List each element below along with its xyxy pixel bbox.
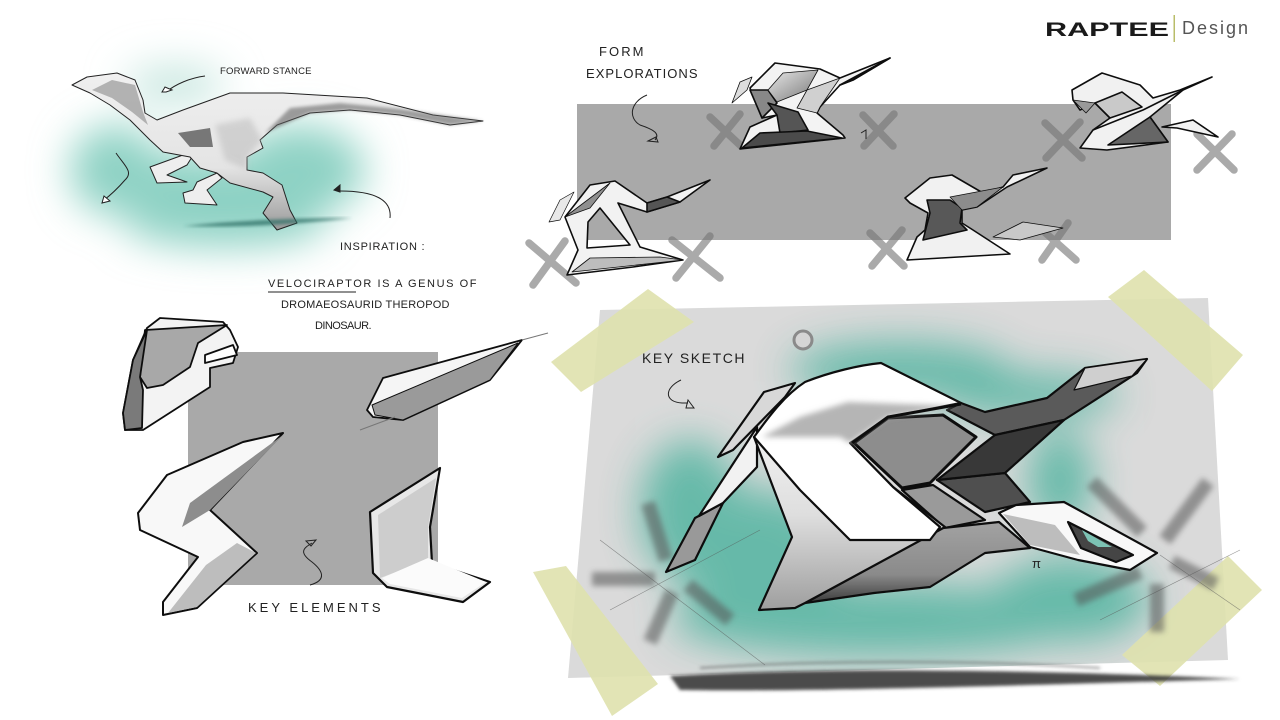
tail shading <box>265 103 483 133</box>
upper fork <box>699 427 757 516</box>
logo: Raptee Design: Design <box>1182 18 1248 38</box>
element sketch: bracket <box>370 468 490 602</box>
watercolor wash behind raptor <box>70 65 365 247</box>
motorcycle sketch <box>666 359 1157 610</box>
rejection crosses <box>529 114 1234 285</box>
watercolor wash <box>640 342 1150 656</box>
note: velociraptor description: VELOCIRAPTOR IS A GENUS OF <box>268 278 478 290</box>
heading: key sketch: KEY SKETCH <box>642 350 746 366</box>
gray panel <box>854 415 976 488</box>
pi mark: π <box>1032 556 1041 571</box>
arrow <box>304 540 322 585</box>
tank shading <box>762 402 958 443</box>
arrow <box>632 95 658 142</box>
arrows <box>102 76 390 218</box>
panel: form explorations <box>529 44 1234 285</box>
element sketch: blade <box>360 333 548 430</box>
headlight <box>718 383 795 457</box>
lower dark panel <box>937 473 1030 512</box>
form sketch 1 <box>732 58 890 149</box>
middle panel <box>902 485 985 528</box>
element sketch: visor <box>123 318 238 430</box>
panel: velociraptor inspiration <box>70 65 483 332</box>
form sketch 3 <box>549 180 710 275</box>
form sketch 2 <box>1072 73 1218 150</box>
element sketch: zigzag <box>138 433 283 615</box>
head shading <box>92 80 148 125</box>
heading: form explorations <box>586 44 699 81</box>
note: inspiration: INSPIRATION : <box>340 241 426 253</box>
arrow <box>668 380 694 408</box>
heading: form explorations: EXPLORATIONS <box>586 66 699 81</box>
logo: Raptee Design: RAPTEE <box>1045 20 1169 41</box>
note: velociraptor description: DINOSAUR. <box>315 320 373 332</box>
panel edge <box>852 404 961 443</box>
upper dark panel <box>937 420 1064 480</box>
white top shell <box>754 363 961 540</box>
pinned paper <box>568 298 1228 678</box>
gray backdrop <box>188 352 438 585</box>
small mark <box>861 130 866 139</box>
side shell <box>754 420 945 610</box>
belly shadow <box>178 128 213 147</box>
rear fender <box>999 502 1157 570</box>
thigh shading <box>215 118 262 170</box>
logo: Raptee Design <box>1045 15 1248 42</box>
body and tail <box>72 73 483 230</box>
heading: form explorations: FORM <box>599 44 645 59</box>
construction lines <box>600 530 1240 665</box>
form sketch 4 <box>905 168 1063 260</box>
velociraptor sketch <box>72 73 483 230</box>
pin <box>794 331 812 349</box>
arm <box>150 155 192 183</box>
panel: key elements <box>123 318 548 615</box>
masking tape strips <box>533 270 1262 716</box>
ground shadow <box>183 218 352 227</box>
near leg foot <box>183 173 222 205</box>
heading: key elements: KEY ELEMENTS <box>248 600 382 615</box>
lower fork <box>666 503 723 572</box>
note: velociraptor description <box>268 278 478 332</box>
ground shadow <box>670 662 1240 690</box>
wheel spokes <box>592 482 1216 642</box>
gray backdrop <box>577 104 1171 240</box>
note: forward stance: FORWARD STANCE <box>220 66 313 77</box>
underbody <box>805 522 1030 603</box>
note: velociraptor description: DROMAEOSAURID THEROPOD <box>281 299 451 311</box>
panel: key sketch <box>533 270 1262 716</box>
rear tail <box>947 359 1147 435</box>
